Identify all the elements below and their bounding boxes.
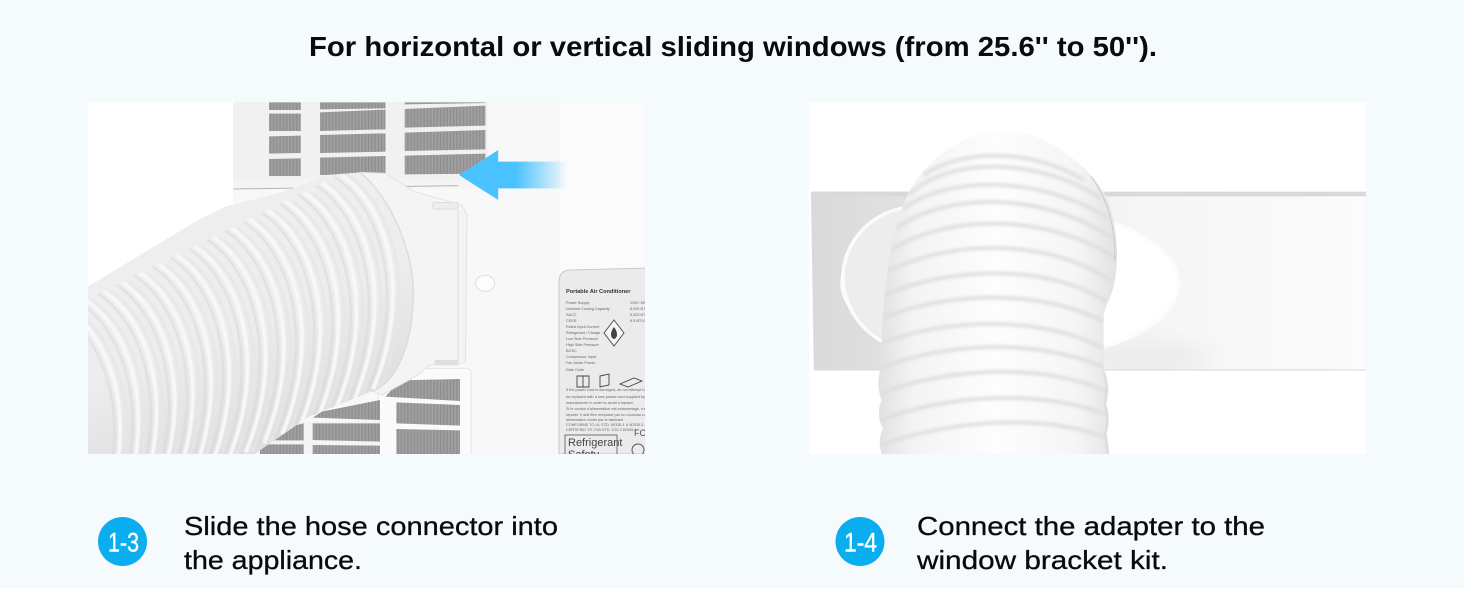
specification label: CEER — [566, 319, 577, 323]
step 1-4 — [836, 511, 1272, 575]
panel: window bracket photo — [809, 102, 1367, 454]
specification label: Portable Air Conditioner — [566, 289, 631, 295]
specification label: High Side Pressure — [566, 343, 599, 347]
badge 1-4 — [836, 517, 884, 566]
step 1-3 — [98, 511, 565, 575]
specification label: Fan Motor Power — [566, 361, 596, 365]
flexible hose — [878, 131, 1117, 454]
specification label: réparer. Il doit être remplacé par un nouveau cordon — [566, 413, 654, 417]
specification label: Safety — [568, 449, 600, 461]
panel: hose connector photo — [88, 102, 645, 454]
caption 1-3: Slide the hose connector into — [184, 511, 558, 541]
specification label: If the power cord is damaged, do not attempt to repair it. — [566, 388, 660, 392]
adapter opening — [840, 225, 1176, 348]
specification label: SACC — [566, 313, 577, 317]
specification label: Refrigerant / Charge — [566, 331, 600, 335]
specification label: Refrigerant — [568, 437, 622, 449]
specification label: CONFORMS TO UL STD. 60335-1 & 60335-2-40 — [566, 423, 649, 427]
specification label: 8,000 BTU/h — [630, 307, 651, 311]
specification label: Si le cordon d'alimentation est endommagé, n'essayez pas — [566, 407, 665, 411]
specification label: 6.5 BTU/Wh — [630, 319, 651, 323]
specification label: Date Code — [566, 368, 584, 372]
specification label: 115V~60Hz — [630, 301, 650, 305]
caption 1-3: the appliance. — [184, 545, 362, 575]
title: For horizontal or vertical sliding windows (from 25.6'' to 50''). — [309, 31, 1157, 62]
specification label — [558, 268, 645, 454]
specification label: BOSC — [566, 349, 577, 353]
specification label: manufacturer in order to avoid a hazard. — [566, 401, 634, 405]
caption 1-4: Connect the adapter to the — [917, 511, 1265, 541]
blue arrow — [459, 150, 567, 200]
badge 1-3: 1-3 — [108, 528, 139, 558]
specification label: Nominal Cooling Capacity — [566, 307, 610, 311]
hole — [476, 275, 495, 291]
specification label: Low Side Pressure — [566, 337, 598, 341]
specification label: 5,000 BTU — [630, 313, 648, 317]
manual icons — [577, 374, 642, 387]
specification label: CERTIFIED TO CSA STD. C22.2 60335-1 — [566, 428, 637, 432]
specification label: Rated Input Current — [566, 325, 600, 329]
caption 1-4: window bracket kit. — [916, 545, 1168, 575]
flammable warning icon — [604, 320, 624, 346]
specification label: Power Supply — [566, 301, 590, 305]
appliance body — [88, 102, 566, 454]
badge 1-4: 1-4 — [844, 528, 877, 558]
specification label: FC — [634, 428, 646, 438]
hose collar — [360, 172, 467, 395]
window bracket — [811, 192, 1367, 375]
hose — [88, 172, 413, 454]
specification label: be replaced with a new power cord supplied by the — [566, 395, 651, 399]
specification label: Compressor Input — [566, 355, 597, 359]
specification label: alimentation fourni par le fabricant — [566, 418, 624, 422]
lower grille — [378, 368, 471, 458]
badge 1-3 — [98, 517, 147, 566]
